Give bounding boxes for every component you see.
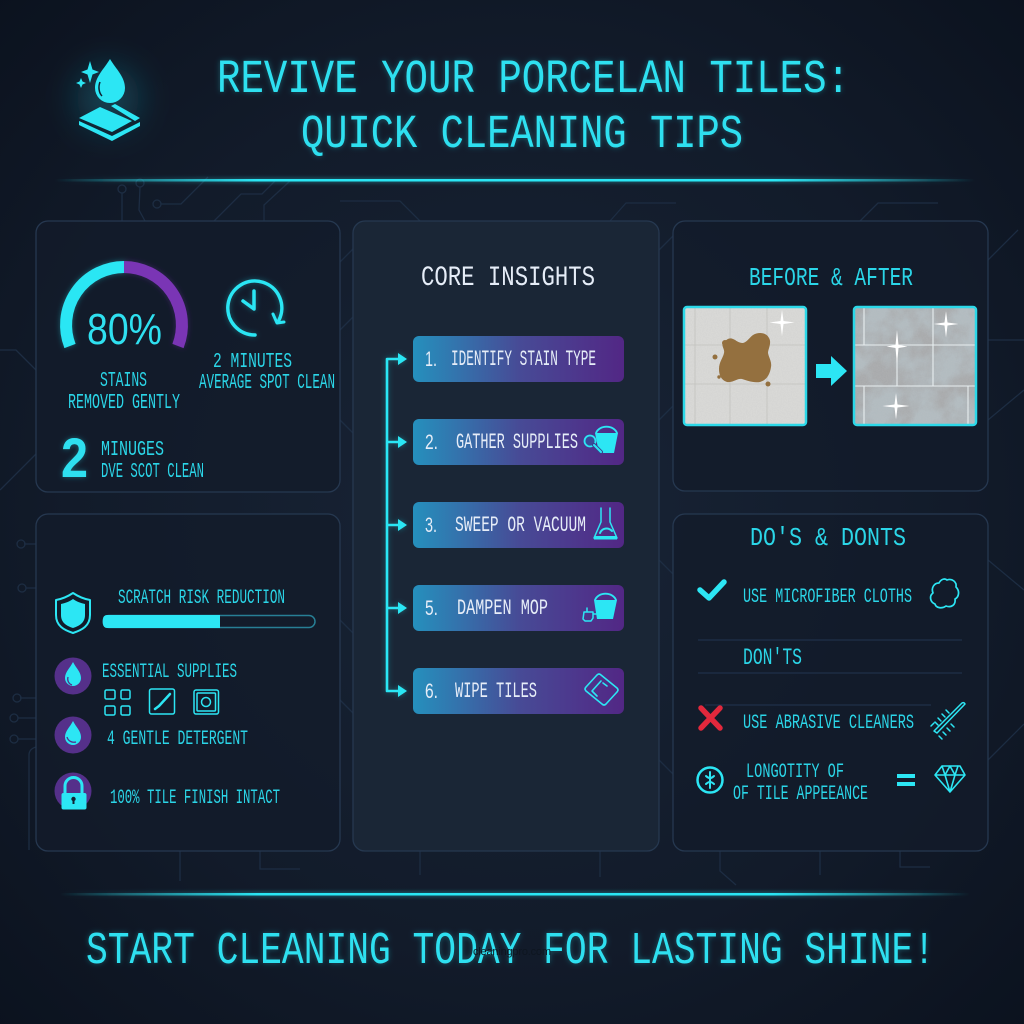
stat: 2 minutes: 2 bbox=[61, 426, 88, 489]
stat: 2 minutes: MINUGES bbox=[101, 439, 164, 462]
icon: water drop bbox=[54, 716, 92, 754]
text: use microfiber cloths: USE MICROFIBER CLOTHS bbox=[743, 586, 912, 609]
icon: bucket and magnifier bbox=[584, 427, 618, 453]
icon: clock bbox=[228, 281, 284, 335]
connector arrows bbox=[387, 353, 407, 697]
step 6: WIPE TILES bbox=[455, 679, 537, 704]
gauge: 80% stains removed bbox=[66, 267, 182, 354]
step 5: DAMPEN MOP bbox=[457, 596, 548, 621]
text: 2 minutes average spot clean: AVERAGE SPOT CLEAN bbox=[199, 372, 335, 395]
step 3 bbox=[413, 502, 624, 548]
image: stained tile bbox=[684, 307, 806, 425]
subheading: don'ts: DON'TS bbox=[743, 645, 802, 671]
icons: supplies bbox=[105, 689, 218, 715]
text: stains removed gently: STAINS bbox=[100, 370, 147, 393]
title: QUICK CLEANING TIPS bbox=[301, 109, 743, 162]
image: clean tile bbox=[854, 307, 976, 425]
logo icon: water drop over tile bbox=[76, 59, 140, 141]
text: use abrasive cleaners: USE ABRASIVE CLEANERS bbox=[743, 712, 914, 735]
heading: do's and donts: DO'S & DONTS bbox=[750, 523, 906, 553]
progress bar: scratch risk reduction: SCRATCH RISK REDUCTION bbox=[118, 587, 285, 610]
icon: cloth bbox=[585, 674, 618, 705]
step 1: 1. bbox=[425, 348, 437, 371]
icon: mop bbox=[594, 508, 617, 540]
step 3: SWEEP OR VACUUM bbox=[455, 513, 586, 538]
text: stains removed gently bbox=[68, 370, 180, 415]
watermark: cleaningpro.com bbox=[473, 946, 551, 958]
title bbox=[217, 54, 850, 162]
step 1 bbox=[413, 336, 624, 382]
icon: cloth bbox=[931, 579, 959, 608]
stat: 2 minutes bbox=[61, 426, 204, 489]
icon: water drop bbox=[54, 658, 92, 694]
heading: before and after: BEFORE & AFTER bbox=[749, 263, 913, 293]
progress bar: scratch risk reduction bbox=[103, 587, 315, 628]
text: stains removed gently: REMOVED GENTLY bbox=[68, 392, 180, 415]
stat: 2 minutes: DVE SCOT CLEAN bbox=[101, 461, 204, 484]
text: longevity of tile appearance bbox=[733, 761, 868, 806]
icon: scrub brush bbox=[931, 703, 965, 739]
panel: core insights bbox=[353, 221, 659, 851]
text: essential supplies: ESSENTIAL SUPPLIES bbox=[102, 661, 237, 684]
icon: shield bbox=[56, 593, 90, 633]
icon: padlock bbox=[54, 772, 92, 810]
icon: equals bbox=[897, 774, 915, 786]
text: longevity of tile appearance: OF TILE APPEEANCE bbox=[733, 783, 868, 806]
panel: do's and don'ts bbox=[673, 514, 988, 851]
panel: stain stats bbox=[36, 221, 340, 492]
text: gentle detergent: 4 GENTLE DETERGENT bbox=[107, 728, 248, 751]
icon: longevity badge bbox=[698, 768, 722, 792]
arrow: before to after bbox=[816, 356, 847, 386]
step 6 bbox=[413, 668, 624, 714]
step 6: 6. bbox=[425, 680, 438, 703]
icon: bucket and glove bbox=[583, 594, 617, 621]
step 2: 2. bbox=[425, 431, 438, 454]
icon: check mark bbox=[700, 582, 724, 598]
icon: diamond bbox=[935, 766, 965, 792]
panel: before and after bbox=[673, 221, 988, 491]
text: 2 minutes average spot clean bbox=[199, 351, 335, 395]
text: 2 minutes average spot clean: 2 MINUTES bbox=[213, 351, 292, 374]
text: longevity of tile appearance: LONGOTITY OF bbox=[746, 761, 844, 784]
icon: red cross bbox=[701, 708, 720, 728]
step 2: GATHER SUPPLIES bbox=[456, 430, 578, 455]
panel: risk and supplies bbox=[36, 514, 340, 851]
step 5: 5. bbox=[425, 597, 438, 620]
step 5 bbox=[413, 585, 624, 631]
step 1: IDENTIFY STAIN TYPE bbox=[451, 347, 596, 372]
title: REVIVE YOUR PORCELAN TILES: bbox=[217, 54, 850, 107]
gauge: 80% stains removed: 80% bbox=[87, 305, 162, 354]
heading: core insights: CORE INSIGHTS bbox=[421, 263, 595, 294]
step 2 bbox=[413, 419, 624, 465]
text: tile finish intact: 100% TILE FINISH INTACT bbox=[110, 787, 280, 810]
step 3: 3. bbox=[425, 514, 437, 537]
